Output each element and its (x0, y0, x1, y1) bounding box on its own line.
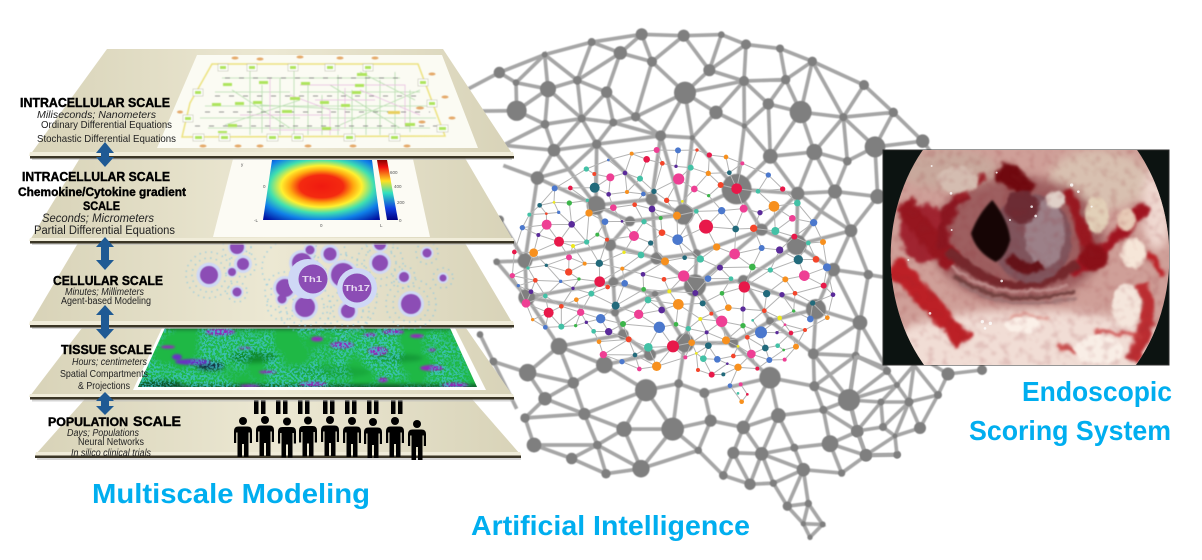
heatmap: concentration field: -L (254, 218, 258, 223)
text block: population scale: In silico clinical trials (71, 448, 151, 459)
text block: intracellular scale: Miliseconds; Nanometers (37, 109, 157, 121)
cell: Th1: Th1 (302, 275, 323, 284)
text block: gradient scale: Partial Differential Equations (34, 225, 175, 237)
diagram: signalling pathway network (177, 56, 456, 148)
icon: front row people (234, 416, 426, 460)
text block: gradient scale: Chemokine/Cytokine gradient (18, 187, 186, 199)
text block: tissue scale: & Projections (78, 380, 130, 392)
cell: Th17: Th17 (344, 284, 371, 293)
text block: population scale: Days; Populations (67, 428, 139, 439)
cells: T cell cluster (186, 233, 453, 338)
text block: gradient scale: SCALE (83, 201, 120, 213)
arrow: tissue to population (96, 392, 114, 415)
text block: tissue scale: TISSUE SCALE (61, 343, 152, 357)
text block: tissue scale (60, 343, 152, 392)
text block: population scale: POPULATION (48, 415, 128, 429)
text block: gradient scale (18, 170, 186, 237)
layer: population scale (35, 399, 521, 460)
layer: tissue scale (29, 326, 514, 402)
text block: cellular scale: Minutes; Millimeters (65, 287, 144, 298)
text block: intracellular scale (20, 96, 176, 145)
heatmap: tissue image (138, 328, 477, 387)
heatmap: concentration field: 0 (320, 223, 323, 228)
arrow: cellular to tissue (96, 305, 114, 339)
text block: gradient scale: Seconds; Micrometers (42, 213, 154, 225)
text block: cellular scale (53, 274, 163, 307)
lumen of bowel (971, 200, 1010, 262)
text block: cellular scale: Agent-based Modeling (61, 296, 151, 307)
text block: intracellular scale: Stochastic Differential Equations (37, 133, 176, 145)
layer: cellular scale (29, 233, 514, 338)
icon: rear row legs (254, 400, 402, 414)
text block: tissue scale: Spatial Compartments (60, 368, 148, 380)
layer: intracellular scale (29, 49, 514, 160)
text block: population scale: Neural Networks (78, 437, 144, 448)
cell: Th1 (288, 259, 328, 299)
heatmap: concentration field: 0 (399, 218, 402, 223)
caption: endoscopic scoring system: Endoscopic (1022, 376, 1172, 407)
heatmap: concentration field: y (241, 162, 244, 167)
heatmap: concentration field: 0 (263, 184, 266, 189)
text block: tissue scale: Hours; centimeters (72, 357, 147, 368)
layer: gradient scale (29, 158, 514, 245)
caption: artificial intelligence: Artificial Intelligence (471, 510, 750, 541)
arrow: intracellular to gradient (96, 142, 114, 167)
cell: Th17 (337, 268, 377, 308)
text block: population scale (48, 413, 181, 459)
panel: endoscopic photo (883, 150, 1172, 383)
heatmap: concentration field (241, 160, 405, 228)
caption: endoscopic scoring system: Scoring System (969, 415, 1171, 446)
heatmap: concentration field: 200 (397, 200, 405, 205)
text block: gradient scale: INTRACELLULAR SCALE (22, 170, 170, 184)
arrow: gradient to cellular (96, 237, 114, 270)
caption: multiscale modeling: Multiscale Modeling (92, 478, 370, 509)
inner coloured brain network (510, 147, 835, 404)
outer brain network (450, 28, 987, 540)
text block: intracellular scale: INTRACELLULAR SCALE (20, 96, 170, 110)
heatmap: concentration field: 600 (390, 170, 398, 175)
text block: cellular scale: CELLULAR SCALE (53, 274, 163, 288)
text block: population scale: SCALE (133, 413, 181, 429)
text block: intracellular scale: Ordinary Differential Equations (41, 119, 172, 131)
caption: endoscopic scoring system (969, 376, 1172, 446)
heatmap: concentration field: 400 (394, 184, 402, 189)
heatmap: concentration field: L (380, 223, 383, 228)
